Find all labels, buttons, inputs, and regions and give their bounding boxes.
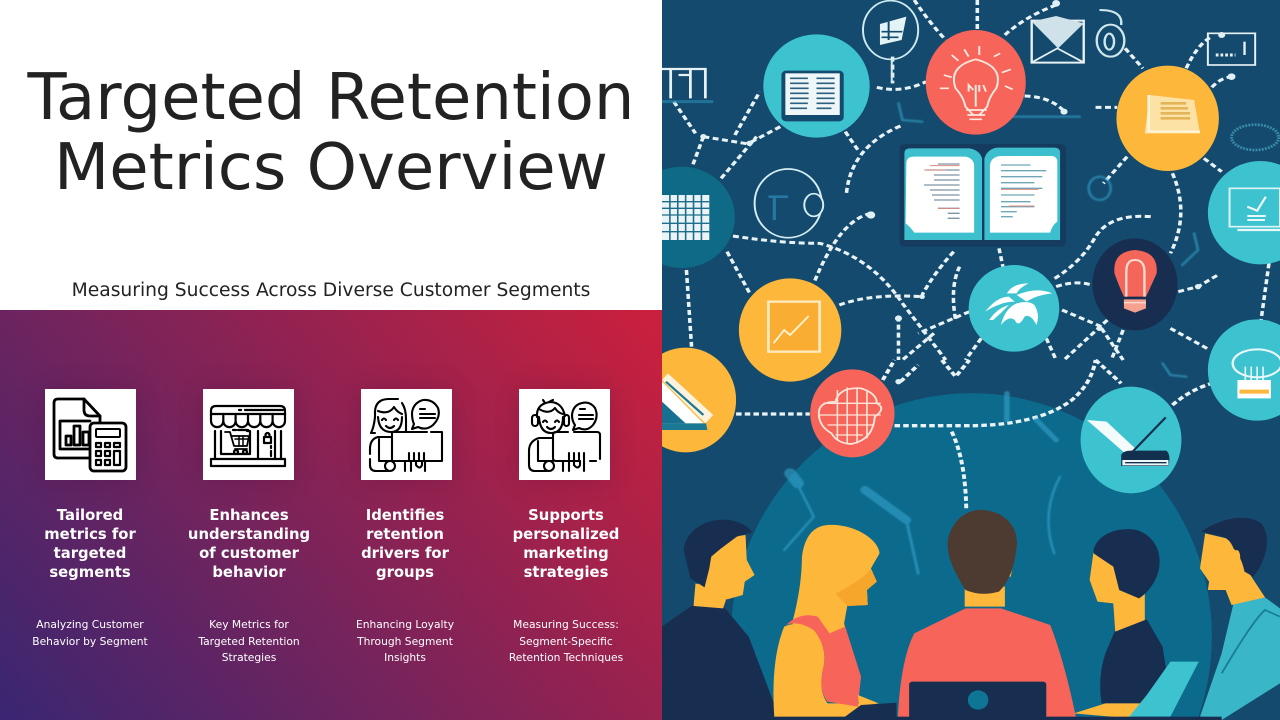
circle: open book — [763, 34, 870, 138]
icon: loop badge — [1097, 10, 1124, 57]
network junction nodes — [700, 0, 1235, 384]
person: man at far right — [1200, 518, 1280, 720]
text: key metrics: Key Metrics for — [209, 618, 289, 631]
subtitle: Measuring Success Across Diverse Customer Segments — [72, 280, 590, 301]
circle: yellow pencil — [635, 348, 736, 452]
circle: teal device right edge — [1208, 319, 1280, 421]
laptop: front center — [909, 682, 1046, 720]
person: woman at right — [1074, 529, 1167, 718]
icon: report and calculator — [45, 389, 136, 480]
text: enhancing loyalty: Enhancing Loyalty — [356, 618, 454, 631]
text: analyzing customer behavior: Analyzing Customer — [36, 618, 144, 631]
table edge — [662, 717, 1222, 720]
circle: teal leaf — [969, 265, 1059, 352]
circle: dark teal keyboard — [628, 167, 735, 268]
circle: yellow ledger — [1116, 66, 1219, 171]
circle: teal laptop check — [1081, 387, 1181, 493]
text: measuring success: Measuring Success: — [513, 618, 619, 631]
text: measuring success — [509, 618, 623, 664]
laptop: teal screen — [1129, 662, 1199, 717]
title: Targeted Retention — [28, 61, 634, 135]
heading: personalized marketing — [513, 507, 619, 581]
heading: personalized marketing: personalized — [513, 526, 619, 543]
globe backdrop — [731, 393, 1212, 720]
text: analyzing customer behavior: Behavior by Segment — [32, 634, 148, 648]
text: enhancing loyalty: Through Segment — [357, 634, 453, 648]
title — [27, 61, 634, 205]
heading: tailored metrics: metrics for — [44, 526, 136, 543]
text: key metrics: Strategies — [222, 651, 276, 664]
heading: tailored metrics: targeted — [54, 545, 126, 562]
soft blue glows — [784, 103, 1198, 573]
heading: tailored metrics — [44, 507, 136, 581]
icon: man with headset at laptop — [519, 389, 610, 480]
person: man at left — [662, 520, 780, 720]
laptop: left edge — [844, 703, 897, 718]
icon: envelope — [1032, 16, 1084, 63]
heading: customer behavior: behavior — [212, 564, 286, 581]
heading: tailored metrics: segments — [49, 564, 131, 581]
people: team in discussion — [662, 510, 1280, 720]
heading: customer behavior: Enhances — [209, 507, 289, 524]
icon: pillars at left edge — [662, 69, 705, 98]
icon: small chart card — [1208, 33, 1255, 65]
circle: coral globe — [810, 369, 895, 457]
heading: personalized marketing: marketing — [523, 545, 609, 562]
text: analyzing customer behavior — [32, 618, 148, 648]
heading: personalized marketing: strategies — [524, 564, 608, 581]
circle: teal checklist — [1208, 161, 1280, 264]
icon: storefront with cart — [203, 389, 294, 480]
heading: customer behavior — [188, 507, 310, 581]
outline icon: document badge — [863, 1, 918, 83]
text: measuring success: Segment-Specific — [519, 634, 613, 648]
circle: navy bulb — [1092, 238, 1178, 330]
outline icon: head profile — [755, 169, 823, 238]
text: enhancing loyalty: Insights — [384, 651, 426, 664]
heading: retention drivers: retention — [366, 526, 444, 543]
panel: gradient feature panel — [0, 310, 662, 720]
illustration: network of ideas above a team — [662, 0, 1280, 720]
heading: tailored metrics: Tailored — [57, 507, 123, 524]
person: woman with blonde hair — [773, 525, 880, 718]
text: enhancing loyalty — [356, 618, 454, 664]
dashed network connectors — [674, 0, 1269, 360]
heading: customer behavior: of customer — [199, 545, 299, 562]
icon: woman at laptop with speech bubble — [361, 389, 452, 480]
heading: personalized marketing: Supports — [528, 507, 604, 524]
title: Metrics Overview — [54, 131, 608, 205]
heading: retention drivers: drivers for — [361, 545, 449, 562]
icon: faint ring — [1232, 125, 1279, 150]
heading: customer behavior: understanding — [188, 526, 310, 543]
text: key metrics — [198, 618, 300, 664]
center: open book — [900, 144, 1066, 247]
text: key metrics: Targeted Retention — [198, 634, 300, 648]
heading: retention drivers: groups — [376, 564, 434, 581]
person: man facing away — [898, 510, 1076, 720]
heading: retention drivers — [361, 507, 449, 581]
heading: retention drivers: Identifies — [366, 507, 444, 524]
circle: coral lightbulb — [926, 30, 1026, 135]
text: measuring success: Retention Techniques — [509, 651, 623, 664]
circle: yellow chart — [739, 278, 841, 382]
